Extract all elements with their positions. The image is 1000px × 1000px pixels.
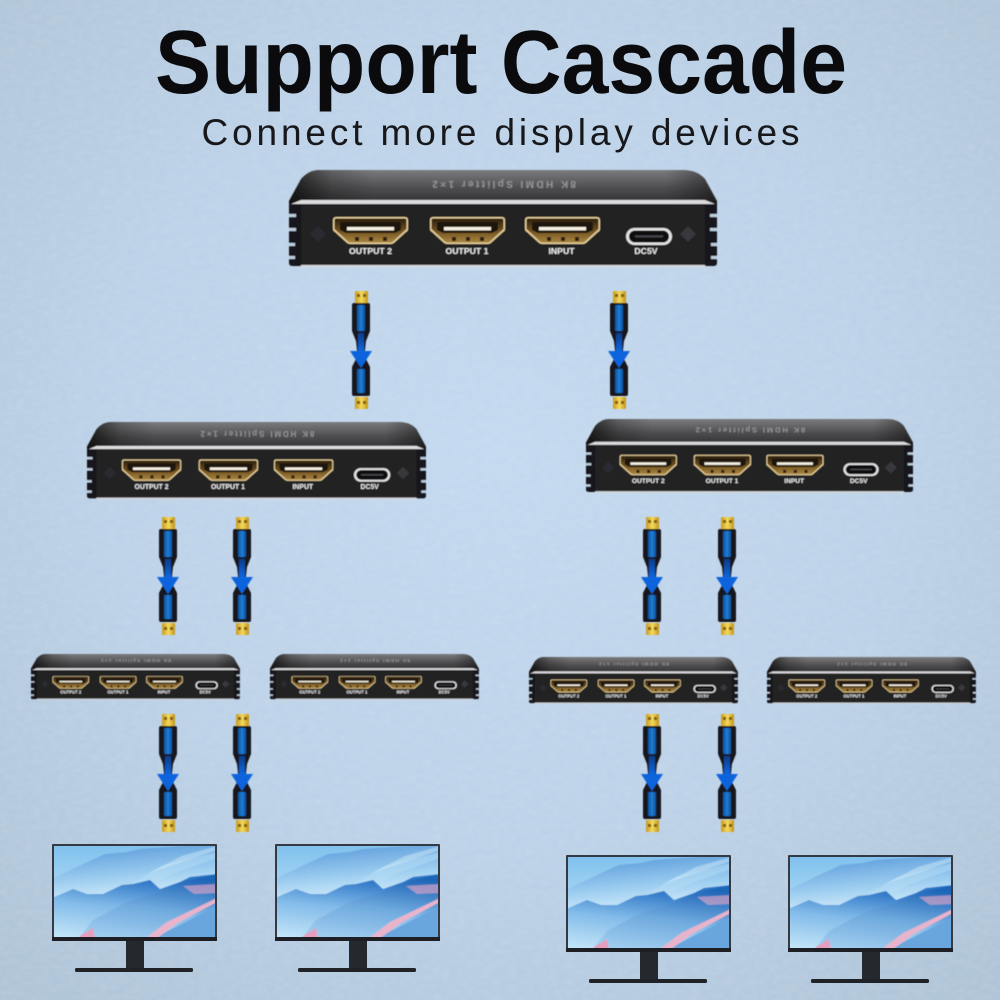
splitter: lower 2 <box>270 654 479 700</box>
title: Support Cascade <box>155 13 847 113</box>
splitter: lower 3: OUTPUT 2 <box>558 693 580 698</box>
cable: top left <box>350 291 372 409</box>
splitter: lower 4: OUTPUT 1 <box>843 693 865 698</box>
cable: third row 2 <box>231 714 253 832</box>
splitter: lower 4: OUTPUT 2 <box>796 693 818 698</box>
splitter: lower 4 <box>767 657 976 704</box>
splitter: top level: OUTPUT 1 <box>446 246 489 256</box>
splitter: lower 4: INPUT <box>894 693 907 698</box>
monitor 4 <box>788 855 953 983</box>
splitter: middle left: OUTPUT 2 <box>135 484 169 491</box>
splitter: middle left <box>87 422 426 500</box>
splitter: lower 1: INPUT <box>158 690 171 694</box>
cable: second row 1 <box>157 517 179 635</box>
splitter: middle right: OUTPUT 1 <box>706 478 739 485</box>
splitter: lower 4: DC5V <box>936 693 947 698</box>
splitter: middle right <box>586 419 913 493</box>
splitter: top level <box>289 170 717 267</box>
subtitle: Connect more display devices <box>202 112 800 153</box>
cable: third row 4 <box>716 714 738 832</box>
cable: second row 4 <box>716 517 738 635</box>
splitter: top level: INPUT <box>548 246 575 256</box>
splitter: lower 1: DC5V <box>200 690 211 694</box>
splitter: lower 1: OUTPUT 1 <box>107 690 129 694</box>
splitter: middle right: DC5V <box>850 478 868 485</box>
splitter: lower 4: 8K HDMI Splitter 1×2 <box>836 660 907 666</box>
splitter: middle left: 8K HDMI Splitter 1×2 <box>199 429 314 438</box>
cable: second row 2 <box>231 517 253 635</box>
splitter: middle right: 8K HDMI Splitter 1×2 <box>694 425 805 434</box>
splitter: lower 2: OUTPUT 2 <box>299 690 321 694</box>
monitor 3 <box>566 855 731 983</box>
splitter: lower 3: OUTPUT 1 <box>605 693 627 698</box>
splitter: lower 1: OUTPUT 2 <box>60 690 82 694</box>
splitter: middle right: INPUT <box>784 478 804 485</box>
splitter: lower 2: OUTPUT 1 <box>346 690 368 694</box>
splitter: top level: DC5V <box>634 246 658 256</box>
splitter: lower 2: 8K HDMI Splitter 1×2 <box>339 657 410 663</box>
splitter: lower 1 <box>31 654 240 700</box>
splitter: middle right: OUTPUT 2 <box>632 478 665 485</box>
splitter: lower 2: DC5V <box>439 690 450 694</box>
splitter: lower 2: INPUT <box>397 690 410 694</box>
splitter: middle left: DC5V <box>361 484 379 491</box>
splitter: top level: OUTPUT 2 <box>349 246 392 256</box>
splitter: lower 3: INPUT <box>656 693 669 698</box>
splitter: lower 3: 8K HDMI Splitter 1×2 <box>598 660 669 666</box>
splitter: lower 1: 8K HDMI Splitter 1×2 <box>100 657 171 663</box>
cable: second row 3 <box>641 517 663 635</box>
monitor 2 <box>275 844 440 972</box>
splitter: top level: 8K HDMI Splitter 1×2 <box>430 178 576 189</box>
splitter: lower 3 <box>529 657 738 704</box>
splitter: lower 3: DC5V <box>698 693 709 698</box>
splitter: middle left: INPUT <box>293 484 314 491</box>
splitter: middle left: OUTPUT 1 <box>211 484 245 491</box>
cable: top right <box>608 291 630 409</box>
cable: third row 3 <box>641 714 663 832</box>
monitor 1 <box>52 844 217 972</box>
cable: third row 1 <box>157 714 179 832</box>
